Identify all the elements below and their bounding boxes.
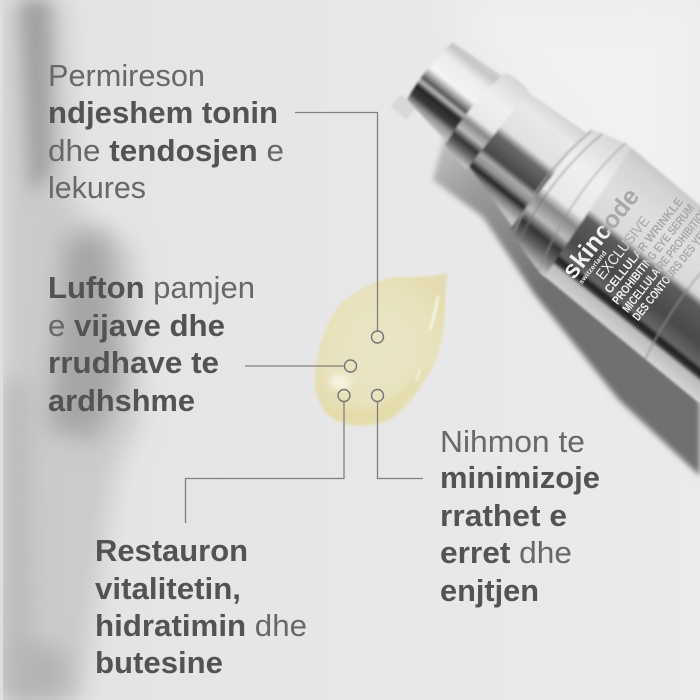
product label: switzerland	[578, 250, 608, 286]
pump tab	[391, 94, 417, 119]
callout text: dark circles	[440, 424, 600, 608]
callout text: skin tone: ndjeshem tonin	[48, 95, 278, 130]
callout text: vitality: Restauron	[95, 533, 248, 568]
callout text: dark circles: Nihmon te	[440, 424, 585, 459]
serum drop	[315, 273, 447, 426]
callout text: wrinkles: e vijave dhe	[48, 308, 225, 343]
callout text: vitality: hidratimin dhe	[95, 608, 307, 643]
product label	[556, 159, 700, 330]
pump bottle	[366, 15, 700, 403]
callout: wrinkles	[48, 270, 356, 418]
callout text: wrinkles: rrudhave te	[48, 345, 219, 380]
callout text: vitality	[95, 533, 307, 680]
callout text: wrinkles: Lufton pamjen	[48, 270, 255, 305]
connector: dark circles	[372, 390, 423, 478]
bottle body	[370, 18, 700, 403]
callout text: dark circles: erret dhe	[440, 535, 572, 570]
callout text: wrinkles: ardhshme	[48, 383, 195, 418]
callout text: skin tone: dhe tendosjen e	[48, 133, 284, 168]
product label: EXCLUSIVE	[593, 213, 653, 283]
callout text: wrinkles	[48, 270, 255, 418]
callout: skin tone	[48, 58, 384, 343]
callout text: skin tone: Permireson	[48, 58, 205, 93]
connector: vitality	[186, 390, 350, 523]
connector: skin tone	[295, 112, 384, 343]
callout text: vitality: butesine	[95, 645, 223, 680]
callout text: dark circles: rrathet e	[440, 498, 567, 533]
product label: skincode	[556, 183, 645, 284]
callout: vitality	[95, 390, 350, 680]
callout text: vitality: vitalitetin,	[95, 571, 241, 606]
callout: dark circles	[372, 390, 600, 608]
connector: wrinkles	[245, 360, 356, 372]
callout text: dark circles: minimizoje	[440, 460, 600, 495]
bottle cast shadow	[433, 135, 700, 476]
product label: CELLULAR WRINKLE	[601, 195, 686, 296]
callout text: skin tone	[48, 58, 284, 205]
callout text: dark circles: enjtjen	[440, 573, 539, 608]
callout text: skin tone: lekures	[48, 170, 146, 205]
